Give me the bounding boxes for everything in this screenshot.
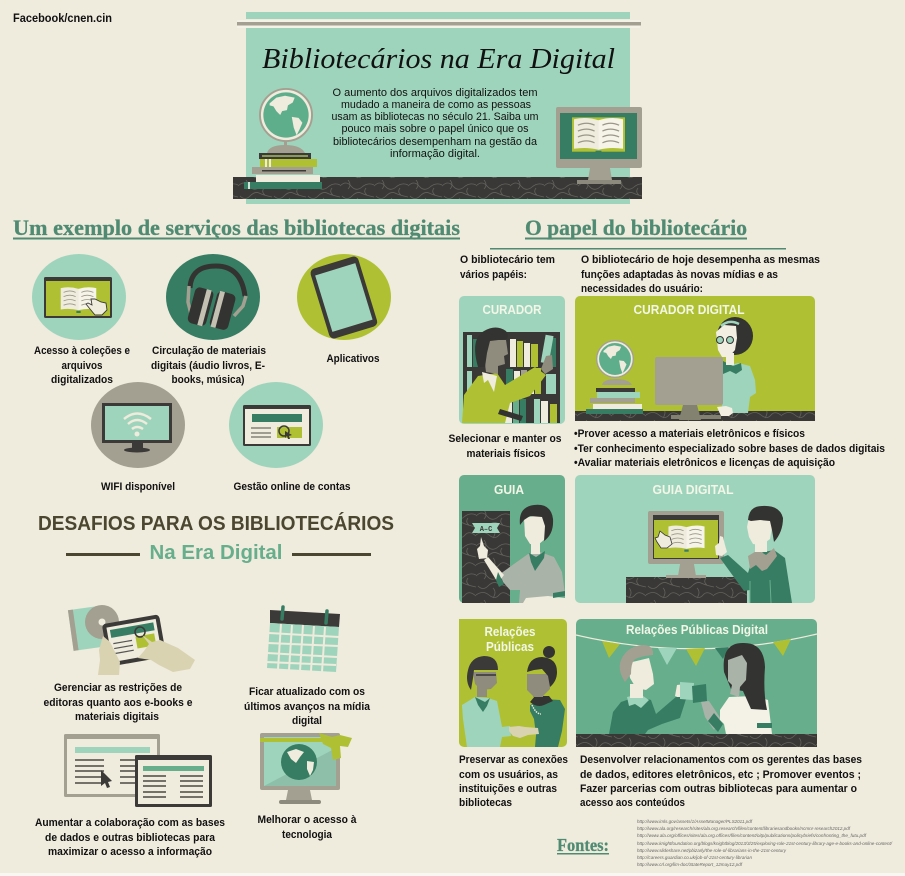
caption: Desenvolver relacionamentos: acesso aos conteúdos	[580, 797, 685, 809]
source list: http://www.slideshare.net/pbizarly/the-role-of-librarians-in-the-21st-century	[637, 848, 787, 853]
panel: Relações Públicas Digital	[576, 619, 817, 747]
caption: Desenvolver relacionamentos: Fazer parcerias com outras bibliotecas para aumentar o	[580, 783, 857, 795]
label: digitais (áudio livros, E-	[151, 360, 265, 372]
figure: man with cup	[609, 645, 694, 734]
label: digital	[292, 715, 322, 727]
figure: digital guide	[715, 506, 792, 603]
intro text: mudado a maneira de como as pessoas	[341, 99, 531, 111]
caption: materiais físicos	[466, 448, 546, 460]
caption: Preservar as conexões	[459, 754, 568, 809]
intro text: vários papéis	[460, 254, 555, 281]
caption bullets: •Ter conhecimento especializado sobre bases de dados digitais	[574, 443, 885, 455]
subheading: Na Era Digital: Na Era Digital	[150, 542, 282, 564]
figure: curator	[462, 328, 553, 423]
label tag A-C: A–C	[480, 526, 492, 534]
heading: O papel do bibliotecário: O papel do bibliotecário	[525, 215, 747, 240]
figures: handshake	[462, 646, 565, 747]
icon: globe on stack of books	[244, 89, 322, 189]
intro text: funções adaptadas	[581, 254, 820, 295]
label	[35, 817, 225, 858]
source list	[637, 819, 893, 867]
intro text: bibliotecários desempenham na gestão da	[333, 136, 538, 148]
caption: Preservar as conexões: Preservar as conexões	[459, 754, 568, 766]
figure: librarian with monitor	[655, 317, 756, 420]
label: Aplicativos	[326, 353, 380, 365]
figure: guide	[477, 505, 565, 603]
source list: http://www.ala.org/offices/sites/ala.org.offices/files/content/oitp/publications/policybriefs/confronting_the_futu.pdf	[637, 833, 867, 838]
service: Aplicativos	[297, 254, 391, 365]
label	[258, 814, 357, 841]
panel: Curador Digital: CURADOR DIGITAL	[634, 302, 745, 317]
icon: globe and books	[586, 341, 643, 414]
label: materiais digitais	[75, 711, 159, 723]
source list: http://www.knightfoundation.org/blogs/knightblog/2013/3/25/exploring-role-21st-century-library-age-e-books-and-online-content/	[637, 841, 893, 846]
icon: monitor with book	[648, 511, 724, 578]
label: Acesso à coleções e	[34, 345, 130, 357]
caption	[448, 433, 562, 460]
panel: Curador Digital	[574, 296, 885, 469]
intro text: funções adaptadas: funções adaptadas às novas mídias e as	[581, 269, 778, 281]
label: últimos avanços na mídia	[244, 701, 371, 713]
label: WIFI disponível	[101, 481, 175, 493]
label: maximizar o acesso a informação	[48, 846, 212, 858]
challenge: colaboração	[35, 734, 225, 858]
label: Melhorar o acesso à	[258, 814, 357, 826]
label: digitalizados	[51, 374, 113, 386]
intro text: informação digital.	[390, 148, 480, 160]
source list: http://www.crl.org/lim-doc/StateReport_12may12.pdf	[637, 862, 743, 867]
subheading: Na Era Digital	[66, 542, 371, 564]
caption: Selecionar e manter os	[448, 433, 562, 445]
panel: Relações Públicas Digital: Relações Públicas Digital	[626, 622, 768, 637]
label: tecnologia	[282, 829, 333, 841]
caption: Preservar as conexões: instituições e outras	[459, 783, 557, 795]
service: Gestão online de contas	[229, 382, 350, 493]
label: Gestão online de contas	[234, 481, 350, 493]
label: de dados e outras bibliotecas para	[45, 832, 216, 844]
challenge: atualizado na mídia digital	[244, 607, 371, 727]
label: arquivos	[62, 360, 102, 372]
intro text: O aumento dos arquivos digitalizados tem	[332, 87, 538, 99]
heading: Um exemplo de serviços: Um exemplo de serviços das bibliotecas digitais	[13, 215, 460, 240]
caption bullets	[574, 428, 885, 469]
service: Acesso a coleções	[32, 254, 130, 386]
source list: http://careers.guardian.co.uk/job-of-21st-century-librarian	[637, 855, 752, 860]
source list: http://www.ala.org/research/sites/ala.org.research/files/content/librariesandbooks/ncmnr-research2012.pdf	[637, 826, 851, 831]
panel title	[484, 624, 536, 654]
intro text: usam as bibliotecas no século 21. Saiba um	[332, 111, 538, 123]
intro text: funções adaptadas: necessidades do usuário:	[581, 283, 703, 295]
label: Aumentar a colaboração com as bases	[35, 817, 225, 829]
label: Gerenciar as restrições de	[54, 682, 182, 694]
source list: http://www.imls.gov/assets/1/AssetManager/PLS2011.pdf	[637, 819, 753, 824]
caption: Desenvolver relacionamentos: Desenvolver relacionamentos com os gerentes das bases	[580, 754, 862, 766]
panel: header	[233, 12, 642, 204]
label: Circulação de materiais	[152, 345, 266, 357]
bunting	[576, 634, 817, 666]
caption: Desenvolver relacionamentos	[580, 754, 862, 809]
service: Circulação de materiais	[151, 254, 266, 386]
caption: Desenvolver relacionamentos: de dados, editores eletrônicos, etc ; Promover eventos ;	[580, 769, 861, 781]
intro text: vários papéis: vários papéis:	[460, 269, 527, 281]
panel: Curador: CURADOR	[482, 302, 542, 317]
panel: Guia Digital: GUIA DIGITAL	[652, 482, 734, 497]
panel title: Públicas	[486, 639, 534, 654]
page credit: Facebook/cnen.cin: Facebook/cnen.cin	[13, 11, 112, 25]
figure: woman with cup	[692, 643, 772, 734]
caption: Preservar as conexões: bibliotecas	[459, 797, 512, 809]
heading: Desafios: DESAFIOS PARA OS BIBLIOTECÁRIOS	[38, 512, 394, 535]
challenge: acesso à tecnologia	[258, 733, 357, 841]
label	[244, 686, 371, 727]
label	[151, 345, 266, 386]
intro text: funções adaptadas: O bibliotecário de hoje desempenha as mesmas	[581, 254, 820, 266]
caption bullets: •Prover acesso a materiais eletrônicos e físicos	[574, 428, 805, 440]
service: WIFI disponível	[91, 382, 185, 493]
label: books, música)	[172, 374, 245, 386]
label	[34, 345, 130, 386]
panel: Guia Digital	[575, 475, 815, 603]
title: Bibliotecários na Era Digital	[262, 43, 615, 75]
heading: Fontes: Fontes:	[557, 835, 609, 855]
challenge: restrições de editoras	[44, 605, 195, 723]
label: Ficar atualizado com os	[249, 686, 365, 698]
heading: Desafios	[38, 512, 394, 564]
panel: Relações Públicas	[459, 619, 567, 747]
caption: Preservar as conexões: com os usuários, as	[459, 769, 558, 781]
intro text: vários papéis: O bibliotecário tem	[460, 254, 555, 266]
panel: Curador	[448, 296, 565, 460]
panel title: Relações	[484, 624, 536, 639]
panel: Guia	[459, 475, 565, 603]
label	[44, 682, 192, 723]
label: editoras quanto aos e-books e	[44, 697, 192, 709]
icon: monitor with open book	[556, 107, 642, 184]
intro text: pouco mais sobre o papel único que os	[342, 123, 529, 135]
caption bullets: •Avaliar materiais eletrônicos e licenças de aquisição	[574, 457, 835, 469]
panel: Guia: GUIA	[494, 482, 525, 497]
intro text	[332, 87, 538, 160]
